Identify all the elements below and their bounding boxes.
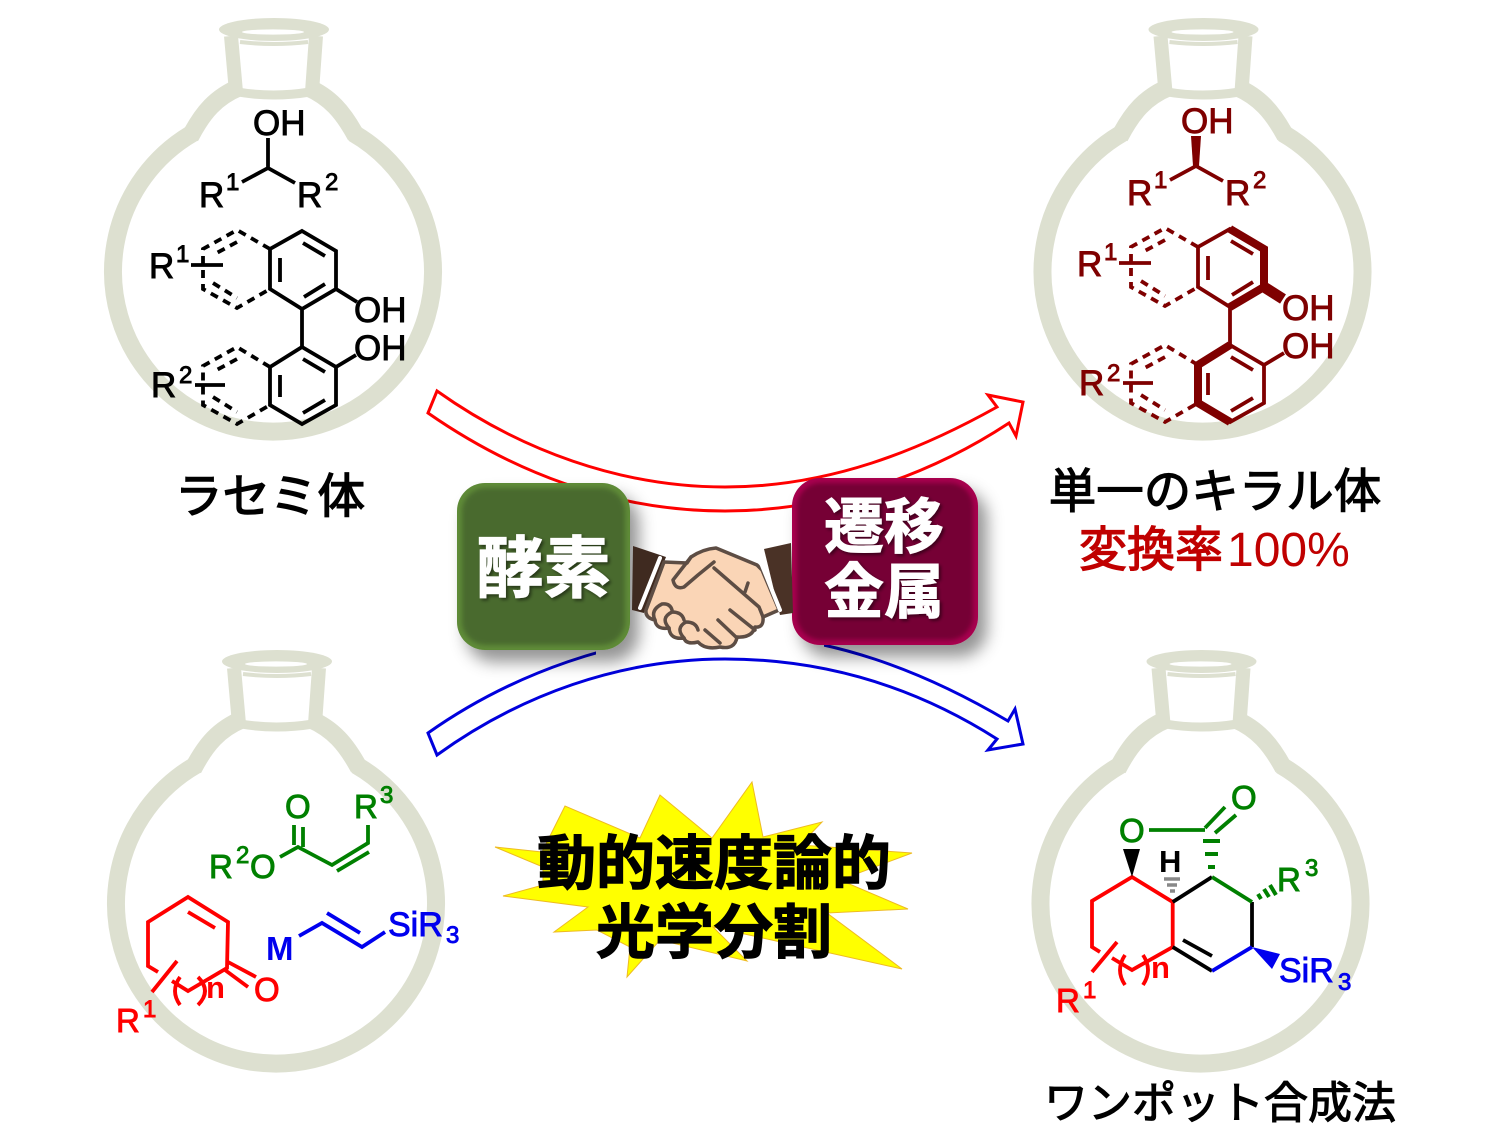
label: dynamic kinetic optical resolution: 光学分割 — [596, 900, 832, 966]
molecule: racemic biaryl diol: 2 — [179, 362, 192, 389]
molecule: chiral alcohol and biaryl diol: 2 — [1107, 360, 1120, 387]
molecule: blue silyl group: SiR — [1279, 952, 1334, 990]
molecule: blue vinyl silane — [266, 906, 459, 967]
molecule: racemic alcohol: OH — [253, 104, 306, 143]
molecule: red ring portion: n — [1151, 950, 1170, 985]
molecule: racemic biaryl diol: OH — [354, 291, 406, 330]
molecule: blue silyl group: 3 — [1338, 969, 1351, 996]
molecule: red ring portion — [1056, 877, 1173, 1019]
molecule: red ring portion: 1 — [1083, 977, 1096, 1004]
molecule: chiral alcohol and biaryl diol: R — [1079, 364, 1104, 403]
molecule: chiral alcohol and biaryl diol: 2 — [1253, 167, 1266, 194]
callout: burst with dynamic kinetic resolution — [495, 782, 912, 977]
panel: racemic starting materials — [113, 18, 433, 524]
molecule: green lactone — [1119, 779, 1318, 902]
molecule: racemic biaryl diol: 1 — [176, 241, 189, 268]
molecule: racemic biaryl diol: R — [151, 366, 176, 405]
flask outline: top right — [1042, 18, 1362, 432]
molecule: red ring portion: R — [1056, 982, 1080, 1019]
molecule: red cyclic enone — [116, 897, 280, 1039]
molecule: racemic alcohol: R — [199, 176, 224, 215]
label: dynamic kinetic optical resolution: 動的速度論的 — [537, 831, 891, 897]
molecule: racemic alcohol: 1 — [226, 169, 239, 196]
molecule: racemic biaryl diol: R — [149, 247, 174, 286]
molecule: green acrylate: 2 — [236, 842, 249, 869]
panel: transition metal box — [792, 478, 978, 645]
molecule: racemic alcohol: 2 — [325, 169, 338, 196]
molecule: blue vinyl silane: SiR — [388, 906, 443, 944]
label: racemate: ラセミ体 — [175, 471, 365, 524]
molecule: chiral alcohol and biaryl diol: OH — [1282, 289, 1334, 328]
panel: one-pot starting materials — [116, 650, 459, 1064]
molecule: black ring bonds and stereo H: H — [1159, 844, 1181, 879]
molecule: chiral alcohol and biaryl diol — [1077, 102, 1334, 422]
molecule: green acrylate: R — [354, 788, 378, 825]
molecule: chiral alcohol and biaryl diol: 1 — [1154, 167, 1167, 194]
molecule: chiral alcohol and biaryl diol: R — [1127, 174, 1152, 213]
molecule: chiral alcohol and biaryl diol: 1 — [1104, 239, 1117, 266]
panel: enzyme box — [457, 483, 630, 650]
arrow: red curved arrow to single chiral product — [428, 391, 1023, 511]
molecule: racemic alcohol — [199, 104, 338, 215]
molecule: blue silyl group — [1212, 947, 1351, 996]
flask outline: top left — [113, 18, 433, 432]
label: single chiral form: 単一のキラル体 — [1049, 466, 1381, 519]
arrow: blue curved arrow to one-pot product — [428, 634, 1023, 755]
molecule: chiral alcohol and biaryl diol: OH — [1181, 102, 1234, 141]
molecule: green lactone: 3 — [1305, 855, 1318, 882]
molecule: chiral alcohol and biaryl diol: R — [1225, 174, 1250, 213]
label: transition metal: 遷移 — [824, 494, 944, 561]
molecule: green acrylate: O — [285, 788, 311, 825]
molecule: red cyclic enone: 1 — [143, 996, 156, 1023]
molecule: racemic alcohol: R — [297, 176, 322, 215]
molecule: racemic biaryl diol — [149, 230, 406, 424]
molecule: red cyclic enone: O — [254, 971, 280, 1008]
molecule: blue vinyl silane: 3 — [446, 922, 459, 949]
label: one-pot synthesis: ワンポット合成法 — [1044, 1079, 1396, 1128]
molecule: green lactone: R — [1277, 861, 1301, 898]
panel: single chiral product — [1042, 18, 1381, 577]
flask outline: bottom left — [116, 650, 436, 1064]
molecule: black ring bonds and stereo H — [1123, 844, 1252, 971]
molecule: green acrylate: O — [250, 848, 276, 885]
molecule: green lactone: O — [1231, 779, 1257, 816]
icon: yellow starburst — [495, 782, 912, 977]
panel: one-pot product — [1040, 650, 1396, 1128]
molecule: racemic biaryl diol: OH — [354, 329, 406, 368]
molecule: red cyclic enone: n — [206, 970, 225, 1005]
icon: handshake — [632, 543, 793, 648]
label: conversion 100%: 変換率100% — [1079, 524, 1350, 577]
molecule: chiral alcohol and biaryl diol: R — [1077, 245, 1102, 284]
label: enzyme: 酵素 — [476, 532, 610, 607]
molecule: blue vinyl silane: M — [266, 930, 294, 967]
label: transition metal: 金属 — [824, 559, 944, 626]
molecule: green acrylate: R — [209, 848, 233, 885]
molecule: green acrylate: 3 — [380, 782, 393, 809]
molecule: green lactone: O — [1119, 812, 1145, 849]
molecule: red cyclic enone: R — [116, 1002, 140, 1039]
flask outline: bottom right — [1040, 650, 1360, 1064]
molecule: green acrylate — [209, 782, 393, 885]
molecule: chiral alcohol and biaryl diol: OH — [1282, 327, 1334, 366]
